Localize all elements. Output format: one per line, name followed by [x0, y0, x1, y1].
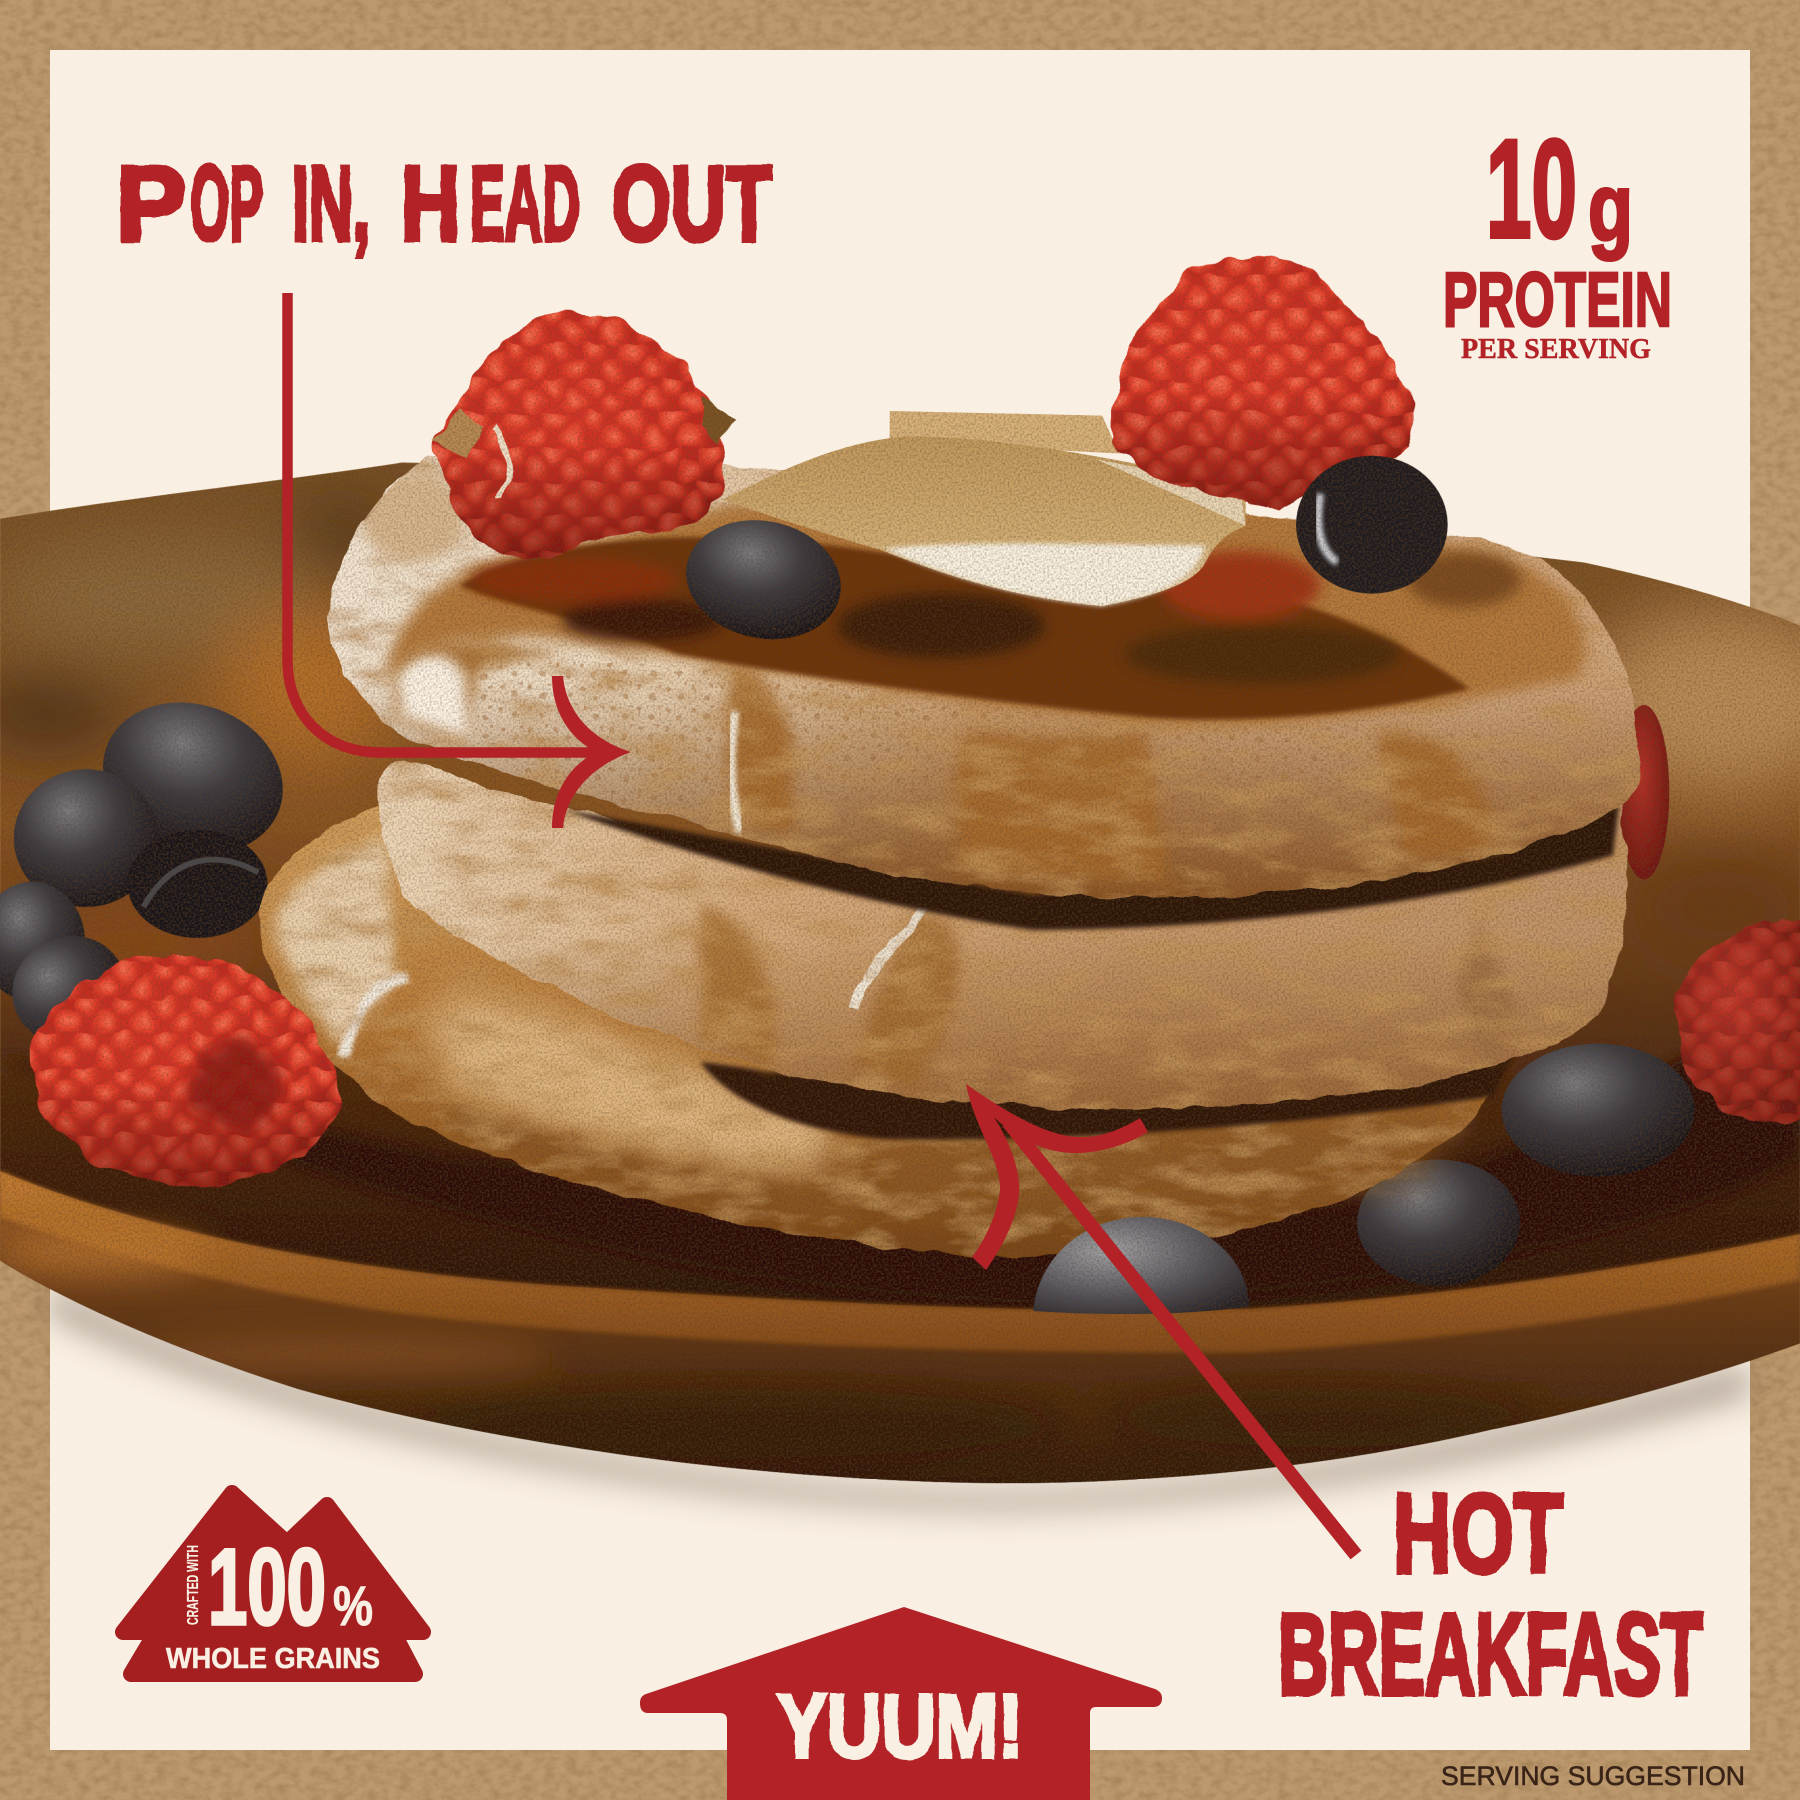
protein callout: 10g protein per serving: 10	[1486, 110, 1577, 267]
plate shadow	[49, 1286, 1750, 1510]
badge: crafted with 100% whole grains: WHOLE GRAINS	[166, 1643, 380, 1675]
berries behind the stack	[0, 678, 1800, 1286]
raspberry top left	[434, 311, 735, 558]
raspberry front left	[30, 954, 339, 1188]
heading: hot breakfast	[1278, 1471, 1703, 1719]
heading: pop in, head out: P	[116, 145, 186, 263]
arrow badge: yuum: YUUM!	[777, 1677, 1023, 1777]
badge: crafted with 100% whole grains	[123, 1493, 423, 1675]
bottom waffle	[258, 804, 1504, 1256]
heading: pop in, head out: OUT	[612, 145, 772, 263]
plate wood mottling	[0, 505, 1800, 987]
blueberries left cluster	[0, 678, 304, 1062]
badge: crafted with 100% whole grains: CRAFTED WITH	[185, 1545, 202, 1625]
blueberries right front	[1502, 1044, 1694, 1177]
heading: pop in, head out: H	[401, 145, 460, 263]
rim underside shade	[0, 1228, 1527, 1458]
butter pat	[723, 411, 1246, 606]
syrup pool	[1, 1050, 1800, 1310]
badge: crafted with 100% whole grains: %	[333, 1574, 373, 1637]
protein callout: 10g protein per serving: PER SERVING	[1461, 334, 1651, 365]
gap between middle and top waffle	[563, 804, 1619, 930]
heading: pop in, head out: EAD	[470, 145, 580, 263]
waffle top face and syrup	[362, 471, 1584, 726]
protein callout: 10g protein per serving: g	[1588, 154, 1633, 261]
blueberry front centre	[1033, 1217, 1249, 1314]
arrow: pop in, head out pointing to top waffle	[288, 293, 631, 828]
blueberries on waffle	[675, 456, 1448, 653]
heading: pop in, head out: OP	[190, 145, 262, 263]
raspberry top right	[1111, 256, 1413, 511]
protein callout: 10g protein per serving	[1443, 110, 1672, 365]
syrup drips on side	[390, 641, 1498, 884]
raspberry far right	[1670, 918, 1800, 1123]
photo: waffle stack on wooden plate	[0, 256, 1800, 1492]
front rim	[0, 1171, 1800, 1353]
arrow: hot breakfast pointing to waffle	[966, 1084, 1356, 1555]
heading: pop in, head out: IN,	[292, 145, 370, 263]
raspberry behind right	[1619, 705, 1669, 879]
wooden plate	[0, 459, 1800, 1492]
plate underside	[0, 1171, 1800, 1492]
heading: hot breakfast: HOT	[1393, 1471, 1563, 1596]
middle waffle	[378, 761, 1627, 1109]
badge: crafted with 100% whole grains: 100	[208, 1526, 326, 1647]
top waffle cream highlights	[396, 654, 740, 832]
gap between bottom and middle waffle	[700, 1050, 1515, 1139]
protein callout: 10g protein per serving: PROTEIN	[1443, 257, 1672, 343]
serving suggestion note: SERVING SUGGESTION	[1441, 1761, 1745, 1791]
top waffle	[327, 457, 1639, 898]
arrow badge: yuum	[640, 1607, 1162, 1800]
